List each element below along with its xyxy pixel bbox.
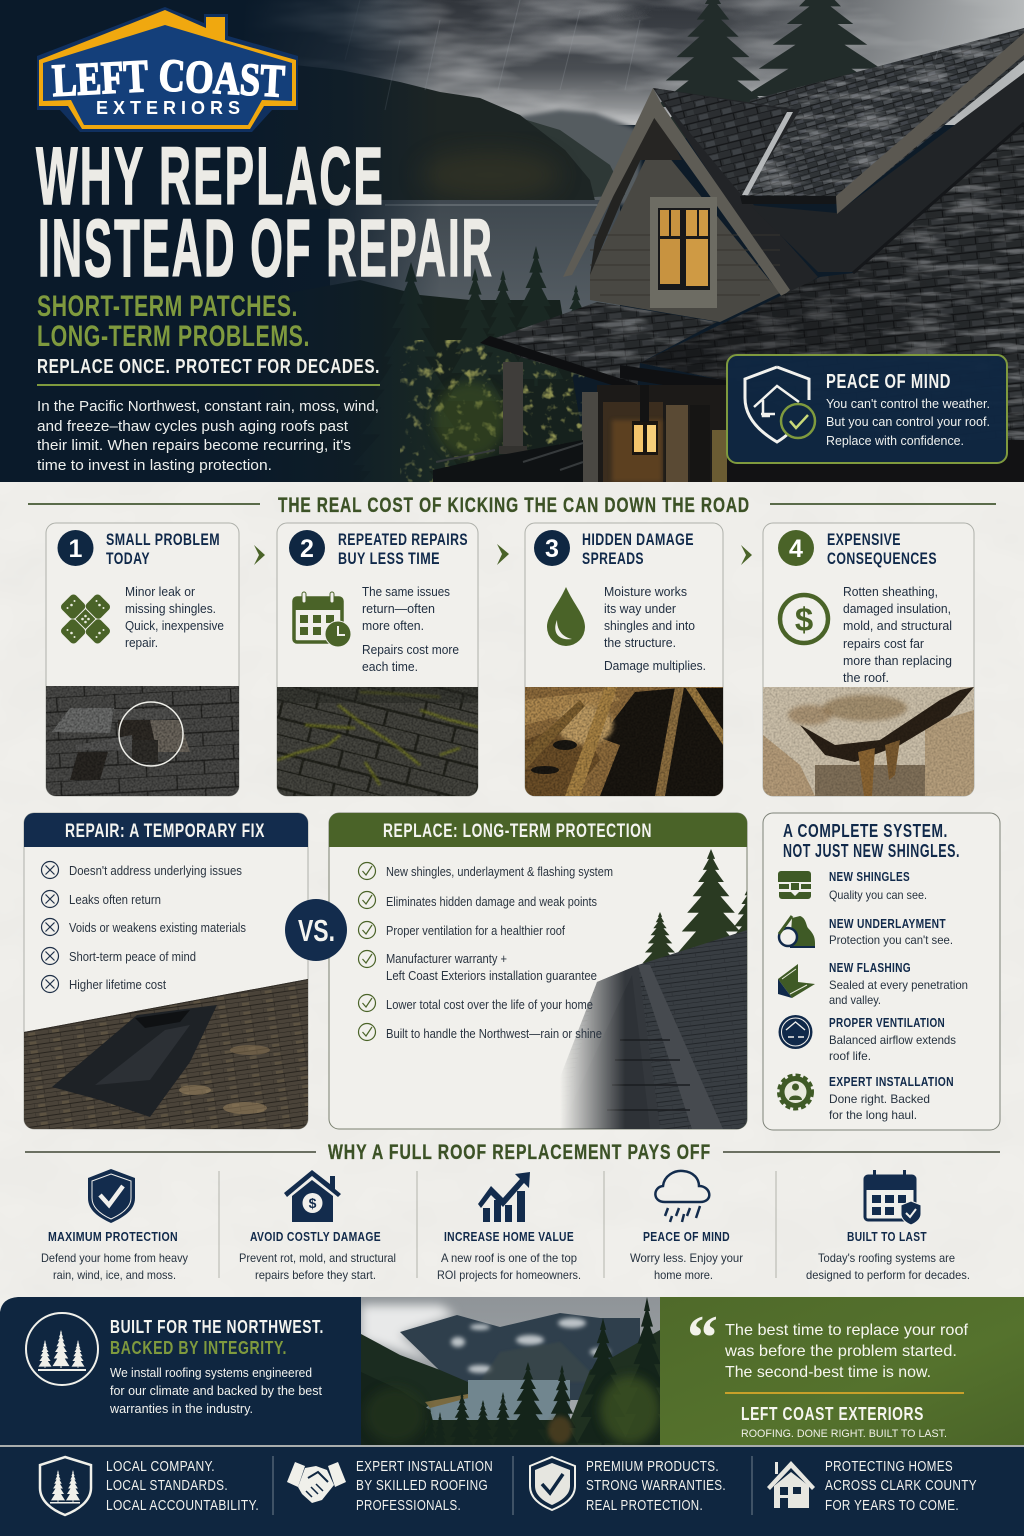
panel: quote: ROOFING. DONE RIGHT. BUILT TO LAST. [741, 1428, 947, 1440]
footer item: protecting homes [767, 1459, 977, 1514]
icon: calendar with shield [865, 1170, 921, 1225]
step 1 text: Quick, inexpensive [125, 619, 224, 633]
benefit: maximum protection: MAXIMUM PROTECTION [48, 1230, 178, 1244]
icon: underlayment roll [779, 916, 815, 948]
VS badge: VS. [298, 913, 335, 948]
replace list [358, 862, 613, 1041]
step 2 text: more often. [362, 619, 424, 633]
replace list: Left Coast Exteriors installation guarantee [386, 969, 597, 983]
benefit: peace of mind [630, 1171, 743, 1282]
step 4 text: Rotten sheathing, [843, 585, 938, 599]
panel: a complete system [763, 813, 1000, 1130]
photo: mossy shingles [277, 687, 478, 796]
intro paragraph: In the Pacific Northwest, constant rain, moss, wind, [37, 398, 379, 415]
step 2 text: each time. [362, 660, 418, 674]
icon: dollar [780, 595, 828, 643]
footer item: local company: LOCAL ACCOUNTABILITY. [106, 1498, 259, 1514]
panel: a complete system: NEW UNDERLAYMENT [829, 917, 946, 931]
benefit: built to last: BUILT TO LAST [847, 1230, 927, 1244]
icon: quotation mark: “ [687, 1304, 718, 1372]
title [36, 131, 494, 294]
photo: collapsed ceiling [763, 687, 974, 796]
photo: rotted roof deck [525, 687, 723, 796]
callout: peace of mind: PEACE OF MIND [826, 371, 951, 393]
panel: step 4 expensive consequences [763, 523, 974, 796]
step 3 text: Damage multiplies. [604, 659, 706, 673]
benefit: built to last: Today's roofing systems are [818, 1251, 955, 1265]
step 2 text: return—often [362, 602, 435, 616]
step 2 text [362, 585, 459, 674]
panel: built for the northwest: We install roofing systems engineered [110, 1366, 312, 1380]
icon: rain cloud [655, 1171, 709, 1222]
icon: trees in circle [26, 1313, 98, 1385]
hero photo: rainy Pacific Northwest house and lake [0, 0, 1024, 510]
replace list: Proper ventilation for a healthier roof [386, 924, 565, 938]
replace list: Built to handle the Northwest—rain or shine [386, 1027, 602, 1041]
subtitle: REPLACE ONCE. PROTECT FOR DECADES. [37, 356, 380, 378]
repair list: Doesn't address underlying issues [69, 864, 242, 878]
title: INSTEAD OF REPAIR [38, 203, 494, 294]
logo wordmark: LEFT [51, 50, 149, 106]
panel: a complete system: and valley. [829, 993, 881, 1007]
panel: step 2 repeated repairs: 2 [300, 535, 314, 563]
panel: built for the northwest: for our climate and backed by the best [110, 1384, 323, 1398]
panel: built for the northwest [0, 1297, 361, 1447]
arrow [254, 545, 265, 565]
icon: shield with trees [40, 1457, 91, 1515]
panel: step 1 small problem today: TODAY [106, 550, 150, 568]
icon: shield check [530, 1457, 575, 1510]
benefit: built to last: designed to perform for decades. [806, 1268, 970, 1282]
benefit: increase home value: INCREASE HOME VALUE [444, 1230, 574, 1244]
panel: step 4 expensive consequences: EXPENSIVE [827, 531, 901, 549]
benefit: increase home value: ROI projects for homeowners. [437, 1268, 581, 1282]
footer item: expert installation: PROFESSIONALS. [356, 1498, 461, 1514]
step 1 text: repair. [125, 636, 158, 650]
step 3 text: its way under [604, 602, 676, 616]
callout: peace of mind [727, 355, 1007, 463]
benefit: peace of mind: Worry less. Enjoy your [630, 1251, 743, 1265]
VS badge [285, 899, 347, 961]
replace list: Manufacturer warranty + [386, 952, 507, 966]
icon: water drop [547, 587, 585, 646]
icon: calendar with clock [294, 592, 351, 647]
footer item: premium products [530, 1457, 726, 1514]
benefit: maximum protection: Defend your home from heavy [41, 1251, 188, 1265]
icon: house [767, 1461, 815, 1508]
panel: a complete system: EXPERT INSTALLATION [829, 1075, 954, 1089]
icon: rising chart [478, 1172, 530, 1222]
panel: step 2 repeated repairs: BUY LESS TIME [338, 550, 440, 568]
repair list [42, 862, 246, 992]
footer item: expert installation: BY SKILLED ROOFING [356, 1478, 488, 1494]
step 3 text: Moisture works [604, 585, 687, 599]
step 1 text [125, 585, 224, 650]
intro paragraph: their limit. When repairs become recurring, it's [37, 437, 351, 454]
icon: shield check [88, 1169, 135, 1223]
panel: quote: LEFT COAST EXTERIORS [741, 1404, 924, 1424]
icon: bandage [47, 581, 124, 657]
benefit: built to last [806, 1170, 970, 1282]
callout: peace of mind: You can't control the weather. [826, 396, 990, 411]
subtitle: LONG-TERM PROBLEMS. [37, 320, 310, 353]
repair list: Leaks often return [69, 893, 161, 907]
step 3 text: the structure. [604, 636, 676, 650]
icon: flashing [778, 964, 815, 998]
panel: step 1 small problem today: SMALL PROBLEM [106, 531, 220, 549]
footer item: local company: LOCAL STANDARDS. [106, 1478, 228, 1494]
panel: step 1 small problem today: 1 [69, 535, 83, 563]
panel: a complete system: Quality you can see. [829, 888, 927, 902]
footer band [0, 1445, 1024, 1536]
benefit: avoid costly damage: repairs before they start. [255, 1268, 376, 1282]
step 2 text: Repairs cost more [362, 643, 459, 657]
panel: step 2 repeated repairs [277, 523, 478, 796]
callout: peace of mind: But you can control your roof. [826, 414, 990, 429]
footer item: expert installation: EXPERT INSTALLATION [356, 1459, 493, 1475]
icon: shield with house and check [745, 367, 815, 442]
panel: quote: The second-best time is now. [725, 1364, 931, 1381]
benefit: increase home value [437, 1172, 581, 1282]
panel: repair, a temporary fix [20, 813, 312, 1135]
step 4 text: more than replacing [843, 654, 952, 668]
panel: step 3 hidden damage: HIDDEN DAMAGE [582, 531, 694, 549]
callout: peace of mind: Replace with confidence. [826, 433, 964, 448]
benefit dividers [219, 1171, 776, 1278]
icon: shingles [778, 871, 811, 899]
step 3 text [604, 585, 706, 673]
footer item: premium products: REAL PROTECTION. [586, 1498, 703, 1514]
panel: a complete system: NEW SHINGLES [829, 870, 910, 884]
panel: quote [660, 1297, 1024, 1447]
benefit: maximum protection [41, 1169, 188, 1282]
repair list: Voids or weakens existing materials [69, 921, 246, 935]
panel: step 3 hidden damage: SPREADS [582, 550, 644, 568]
replace list: Lower total cost over the life of your home [386, 998, 593, 1012]
arrow [741, 545, 752, 565]
panel: a complete system: Balanced airflow extends [829, 1033, 956, 1047]
panel: a complete system: roof life. [829, 1049, 871, 1063]
step 4 text: mold, and structural [843, 619, 952, 633]
panel: a complete system: for the long haul. [829, 1108, 917, 1122]
footer item: local company [40, 1457, 259, 1515]
panel: built for the northwest: BACKED BY INTEGRITY. [110, 1338, 287, 1358]
benefit: avoid costly damage: AVOID COSTLY DAMAGE [250, 1230, 381, 1244]
icon: expert badge [778, 1075, 812, 1109]
benefit: avoid costly damage: Prevent rot, mold, and structural [239, 1251, 396, 1265]
logo: Left Coast Exteriors house badge [37, 7, 298, 132]
photo: new roof and evergreens [562, 849, 747, 1129]
icon: ventilation [778, 1015, 812, 1049]
panel: step 2 repeated repairs: REPEATED REPAIRS [338, 531, 468, 549]
intro paragraph: time to invest in lasting protection. [37, 457, 272, 474]
panel: built for the northwest: warranties in the industry. [109, 1402, 253, 1416]
repair list: Short-term peace of mind [69, 950, 196, 964]
step 4 text: the roof. [843, 671, 889, 685]
footer item: premium products: STRONG WARRANTIES. [586, 1478, 726, 1494]
panel: a complete system: A COMPLETE SYSTEM. [783, 821, 948, 841]
heading: the real cost: THE REAL COST OF KICKING THE CAN DOWN THE ROAD [278, 494, 750, 517]
panel: a complete system: Protection you can't see. [829, 933, 953, 947]
logo subtext: EXTERIORS [96, 98, 240, 118]
footer item: protecting homes: FOR YEARS TO COME. [825, 1498, 959, 1514]
icon: handshake [287, 1462, 346, 1503]
photo: mountain lake and evergreens [361, 1297, 672, 1453]
photo: tarp on worn roof [20, 975, 312, 1135]
panel: step 1 small problem today [46, 523, 239, 796]
icon: dollar: $ [795, 601, 813, 638]
panel: step 3 hidden damage: 3 [545, 535, 559, 563]
arrow [497, 544, 509, 565]
benefit: increase home value: A new roof is one of the top [441, 1251, 577, 1265]
title: WHY REPLACE [36, 131, 385, 222]
step 4 text: repairs cost far [843, 637, 924, 651]
photo: missing shingles [46, 686, 239, 796]
intro paragraph: and freeze–thaw cycles push aging roofs past [37, 418, 349, 435]
footer item: protecting homes: ACROSS CLARK COUNTY [825, 1478, 977, 1494]
subtitle [37, 290, 380, 378]
footer item: premium products: PREMIUM PRODUCTS. [586, 1459, 719, 1475]
panel: step 4 expensive consequences: CONSEQUENCES [827, 550, 937, 568]
logo wordmark [51, 49, 286, 107]
benefit: avoid costly damage [239, 1170, 396, 1282]
replace list: Eliminates hidden damage and weak points [386, 895, 597, 909]
panel: a complete system: PROPER VENTILATION [829, 1016, 945, 1030]
panel: a complete system: Sealed at every penetration [829, 978, 968, 992]
logo wordmark: COAST [157, 49, 286, 107]
step 1 text: Minor leak or [125, 585, 195, 599]
step 4 text [843, 585, 952, 685]
repair list: Higher lifetime cost [69, 978, 166, 992]
panel: step 4 expensive consequences: 4 [789, 535, 803, 563]
intro paragraph [37, 398, 379, 474]
panel: a complete system: Done right. Backed [829, 1092, 930, 1106]
icon: house with dollar [284, 1170, 341, 1222]
step 3 text: shingles and into [604, 619, 695, 633]
footer item: local company: LOCAL COMPANY. [106, 1459, 215, 1475]
panel: replace, long-term protection: REPLACE: LONG-TERM PROTECTION [383, 821, 652, 842]
panel: quote: was before the problem started. [724, 1343, 957, 1360]
replace list: New shingles, underlayment & flashing system [386, 865, 613, 879]
icon: house with dollar: $ [309, 1195, 317, 1211]
step 2 text: The same issues [362, 585, 450, 599]
step 1 text: missing shingles. [125, 602, 216, 616]
step 4 text: damaged insulation, [843, 602, 951, 616]
benefit: maximum protection: rain, wind, ice, and moss. [53, 1268, 176, 1282]
subtitle: SHORT-TERM PATCHES. [37, 290, 298, 323]
footer item: expert installation [287, 1459, 493, 1514]
panel: built for the northwest: BUILT FOR THE NORTHWEST. [110, 1317, 324, 1337]
benefit: peace of mind: home more. [654, 1268, 713, 1282]
panel: replace, long-term protection [329, 813, 772, 1129]
panel: quote: The best time to replace your roof [725, 1322, 969, 1339]
benefit: peace of mind: PEACE OF MIND [643, 1230, 730, 1244]
heading: why a full roof replacement pays off: WHY A FULL ROOF REPLACEMENT PAYS OFF [328, 1141, 711, 1164]
panel: step 3 hidden damage [525, 523, 723, 796]
panel: repair, a temporary fix: REPAIR: A TEMPORARY FIX [65, 821, 265, 842]
footer item: protecting homes: PROTECTING HOMES [825, 1459, 953, 1475]
panel: a complete system: NEW FLASHING [829, 961, 911, 975]
